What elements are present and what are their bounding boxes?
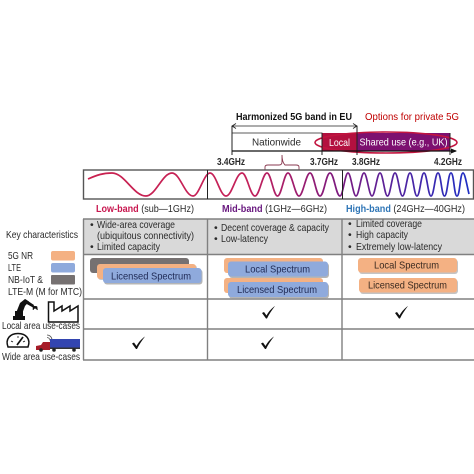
label: key characteristics: Key characteristics (6, 229, 78, 241)
low-band characteristics: Wide-area coverage (97, 219, 175, 231)
high-band characteristics: • (348, 241, 352, 253)
frequency labels: 3.8GHz (352, 156, 380, 168)
mid-band spectrum blocks: Licensed Spectrum (237, 284, 317, 296)
low-band spectrum blocks: Licensed Spectrum (111, 270, 191, 282)
high-band characteristics: Limited coverage (356, 218, 422, 230)
frequency labels (217, 156, 462, 168)
high-band spectrum blocks: Local Spectrum (374, 260, 439, 272)
legend: technologies: LTE-M (M for MTC) (8, 286, 82, 298)
heading: harmonized 5G band in EU: Harmonized 5G band in EU (236, 111, 352, 123)
legend: technologies: 5G NR (8, 250, 33, 262)
label: low-band: Low-band (sub—1GHz) (96, 203, 194, 215)
brace linking mid-band to 5G band (265, 155, 299, 170)
checkmark: high-band local (395, 306, 408, 318)
frequency labels: 4.2GHz (434, 156, 462, 168)
diagram: 5G spectrum band segments: Local (329, 137, 350, 149)
diagram: 5G spectrum band segments: Shared use (e.g., UK) (360, 136, 448, 148)
high-band characteristics: High capacity (356, 229, 409, 241)
mid-band characteristics: • (214, 233, 218, 245)
high-band spectrum blocks: Licensed Spectrum (368, 280, 447, 292)
high-band characteristics (348, 218, 443, 253)
heading: options for private 5G: Options for private 5G (365, 111, 459, 123)
mid-band spectrum blocks: Local Spectrum (245, 264, 310, 276)
label: local area use-cases: Local area use-cases (2, 320, 80, 332)
high-band characteristics: • (348, 218, 352, 230)
mid-band characteristics (214, 222, 330, 245)
checkmark: low-band wide (132, 336, 145, 349)
icon: robot arm (13, 299, 38, 320)
checkmark: mid-band wide (261, 336, 274, 349)
mid-band characteristics: • (214, 222, 218, 234)
high-band characteristics: Extremely low-latency (356, 241, 443, 253)
mid-band spectrum blocks (224, 258, 329, 298)
diagram: 5G spectrum band segments (232, 124, 457, 155)
icon: gauge (7, 334, 29, 347)
legend: technologies: LTE (8, 262, 21, 274)
high-band spectrum blocks (358, 258, 458, 294)
label: mid-band: Mid-band (1GHz—6GHz) (222, 203, 327, 215)
icon: truck with wireless signal (36, 335, 80, 352)
icon: factory (48, 302, 78, 322)
label: wide area use-cases: Wide area use-cases (2, 351, 80, 363)
frequency labels: 3.7GHz (310, 156, 338, 168)
label: high-band: High-band (24GHz—40GHz) (346, 203, 465, 215)
mid-band characteristics: Low-latency (221, 233, 269, 245)
high-band characteristics: • (348, 229, 352, 241)
mid-band characteristics: Decent coverage & capacity (221, 222, 330, 234)
legend: technologies (8, 250, 82, 298)
low-band characteristics: • (90, 219, 94, 231)
diagram: 5G spectrum band segments: Nationwide (252, 136, 301, 148)
table grid (83, 219, 474, 360)
frequency labels: 3.4GHz (217, 156, 245, 168)
wave chart: frequency bands (84, 170, 474, 199)
low-band characteristics (90, 219, 194, 253)
legend: technologies: NB-IoT & (8, 274, 43, 286)
low-band characteristics: • (90, 241, 94, 253)
low-band characteristics: (ubiquitous connectivity) (97, 230, 194, 242)
low-band characteristics: Limited capacity (97, 241, 161, 253)
checkmark: mid-band local (262, 306, 275, 318)
low-band spectrum blocks (90, 258, 202, 284)
